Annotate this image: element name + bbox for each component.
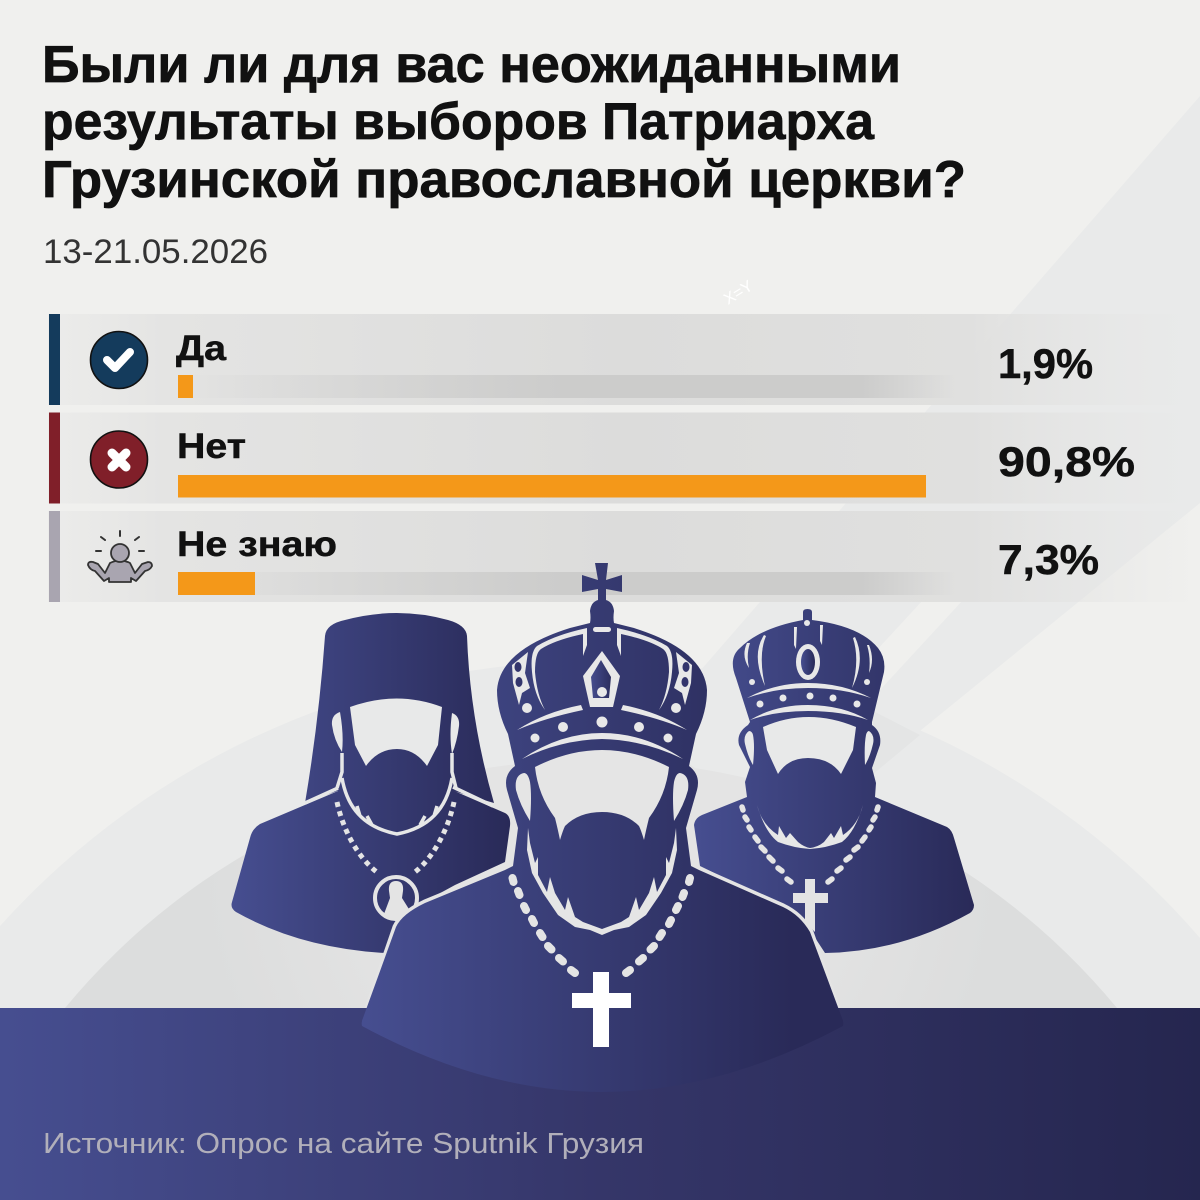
ears <box>332 712 459 754</box>
gem <box>801 649 815 675</box>
accent bar: Да <box>49 314 60 405</box>
label: Нет: Нет <box>177 427 246 466</box>
source: Источник: Опрос на сайте Sputnik Грузия <box>43 1128 644 1160</box>
row: Да <box>48 314 1200 405</box>
necklace <box>337 802 454 873</box>
title: Грузинской православной церкви? <box>42 151 966 209</box>
face <box>763 717 856 774</box>
figure: central bishop <box>362 563 843 1092</box>
shoulders <box>232 770 510 953</box>
value: Да: 1,9% <box>998 340 1093 387</box>
bar: Не знаю <box>178 572 255 595</box>
face <box>350 698 442 766</box>
ears <box>744 731 874 765</box>
figure: right bishop <box>694 609 974 953</box>
pectoral cross <box>793 879 828 932</box>
title: результаты выборов Патриарха <box>42 93 875 151</box>
beard outline <box>337 753 456 834</box>
row: Не знаю <box>48 511 1200 602</box>
bar: Да <box>178 375 193 398</box>
track: Да <box>178 375 955 398</box>
icon: shrug <box>88 531 152 582</box>
beard outline <box>757 805 863 849</box>
value: Нет: 90,8% <box>998 438 1135 485</box>
bottom band <box>0 1008 1200 1200</box>
figure: left bishop <box>232 613 510 953</box>
crown side jewels <box>514 662 690 687</box>
icon: check <box>90 332 148 388</box>
medallion <box>375 877 417 921</box>
label: Не знаю: Не знаю <box>177 525 337 564</box>
face <box>535 750 669 840</box>
icon: cross <box>90 431 148 488</box>
label: Да: Да <box>176 329 227 368</box>
figure: central bishop outline <box>362 768 843 1092</box>
watermark: X=Y <box>721 278 756 308</box>
necklace <box>742 807 878 882</box>
shoulder gaps <box>305 787 493 806</box>
necklace <box>512 878 690 973</box>
crown gem dot <box>597 687 607 697</box>
row: Нет <box>48 412 1200 504</box>
crown details <box>744 620 872 720</box>
accent bar: Нет <box>49 412 60 504</box>
date: 13-21.05.2026 <box>43 233 268 271</box>
silhouette <box>694 609 974 953</box>
track: Не знаю <box>178 572 955 595</box>
pectoral cross <box>572 972 631 1047</box>
beard strands <box>527 828 677 935</box>
ears <box>516 773 688 821</box>
bar: Нет <box>178 475 926 498</box>
title <box>42 36 966 209</box>
crown gem <box>591 660 611 698</box>
silhouette <box>362 563 843 1092</box>
accent bar: Не знаю <box>49 511 60 602</box>
value: Не знаю: 7,3% <box>998 536 1099 583</box>
crown details <box>512 627 692 759</box>
klobuk <box>305 613 494 803</box>
title: Были ли для вас неожиданными <box>42 36 901 94</box>
